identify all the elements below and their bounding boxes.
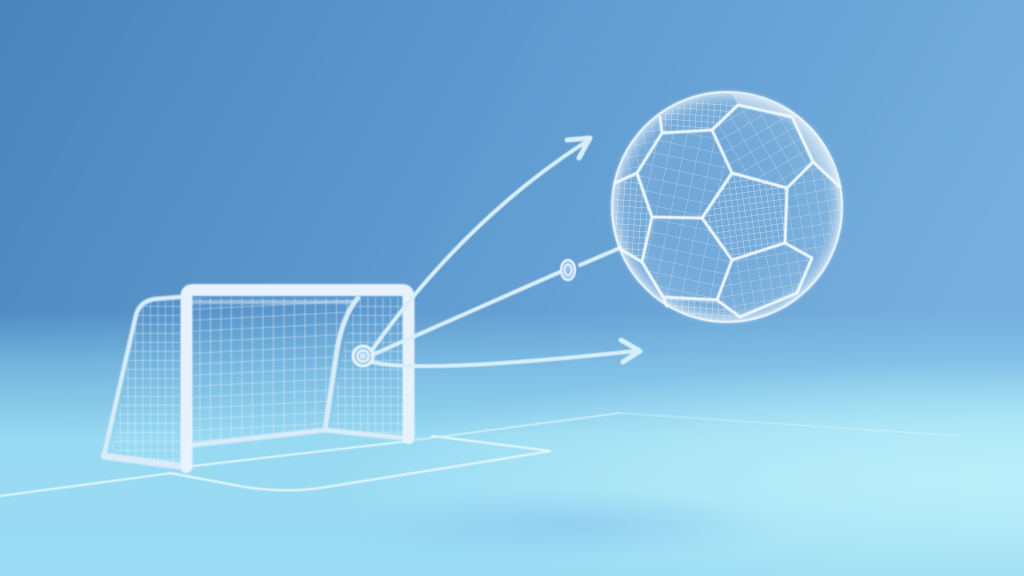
seams xyxy=(615,105,840,317)
panel: lower right hexagon xyxy=(717,243,812,317)
goal frame: rear tubes xyxy=(104,297,403,466)
soccer ball xyxy=(612,92,842,322)
ball outline xyxy=(612,92,842,322)
arrow: middle trajectory to ball xyxy=(372,248,620,355)
pitch lines xyxy=(0,413,960,496)
panel: left pentagon xyxy=(613,173,652,262)
ground shadow under ball xyxy=(350,489,790,561)
panel: lower left hexagon xyxy=(642,217,732,300)
goal xyxy=(104,290,408,467)
panel: right hexagon xyxy=(785,162,841,258)
panel: central pentagon xyxy=(702,173,787,260)
panel: top pentagon xyxy=(660,101,738,133)
arrow: upper trajectory xyxy=(372,138,590,350)
icon: target spiral at goal xyxy=(353,346,373,366)
panel: upper left sliver xyxy=(615,117,662,183)
panel: top right rim xyxy=(733,94,840,187)
net: side xyxy=(112,298,180,466)
net: back xyxy=(193,298,358,446)
goal frame: front posts and crossbar xyxy=(186,290,408,467)
arrow: lower trajectory xyxy=(372,340,640,366)
icon: target spiral on trajectory xyxy=(561,260,575,280)
ball body xyxy=(612,92,842,322)
panel: upper right hexagon xyxy=(712,105,813,188)
net: right side xyxy=(331,298,403,436)
panel: upper left hexagon xyxy=(637,130,732,218)
ball glow xyxy=(613,93,841,321)
panel: bottom pentagon xyxy=(663,297,740,319)
